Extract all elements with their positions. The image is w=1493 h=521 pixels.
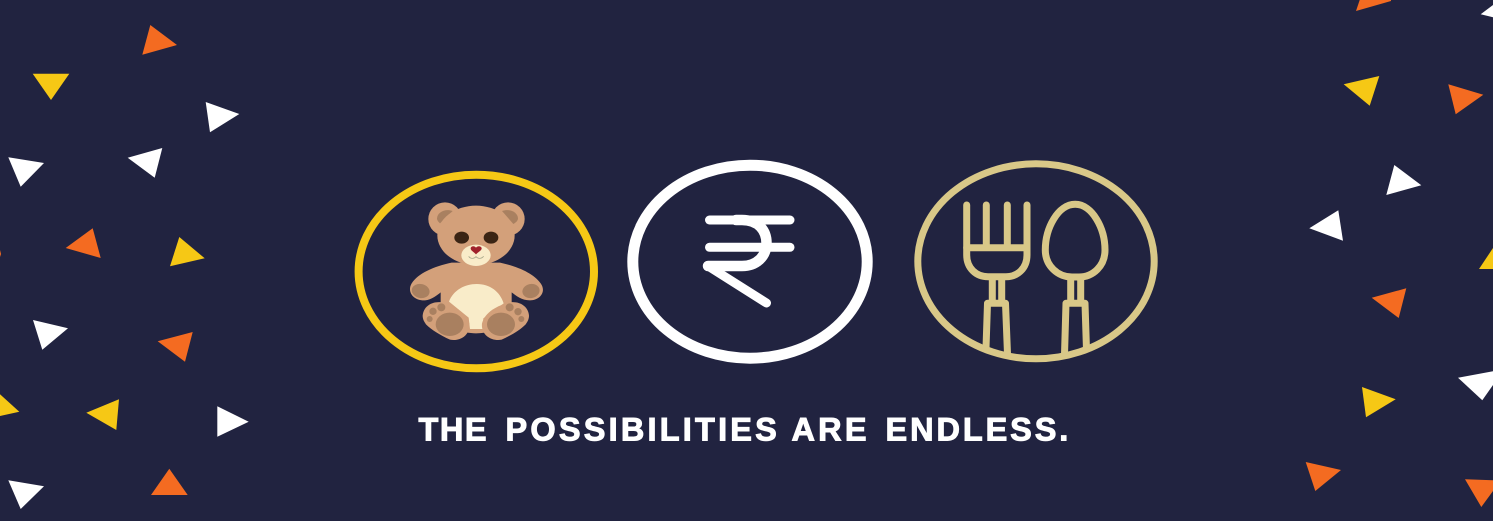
icon: rupee in white circle [633,165,867,358]
confetti triangles: left side [0,25,249,509]
rupee symbol [708,220,790,303]
teddy bear [410,202,543,340]
fork [967,205,1027,354]
tagline: ARE [792,412,870,448]
icon: fork and spoon in tan circle [918,164,1154,359]
spoon [1045,204,1105,354]
tagline: POSSIBILITIES [506,412,780,448]
icon: teddy bear in yellow circle [359,175,594,368]
tagline: ENDLESS. [886,412,1071,448]
confetti triangles: right side [1306,0,1493,507]
tagline: THE [418,412,488,448]
